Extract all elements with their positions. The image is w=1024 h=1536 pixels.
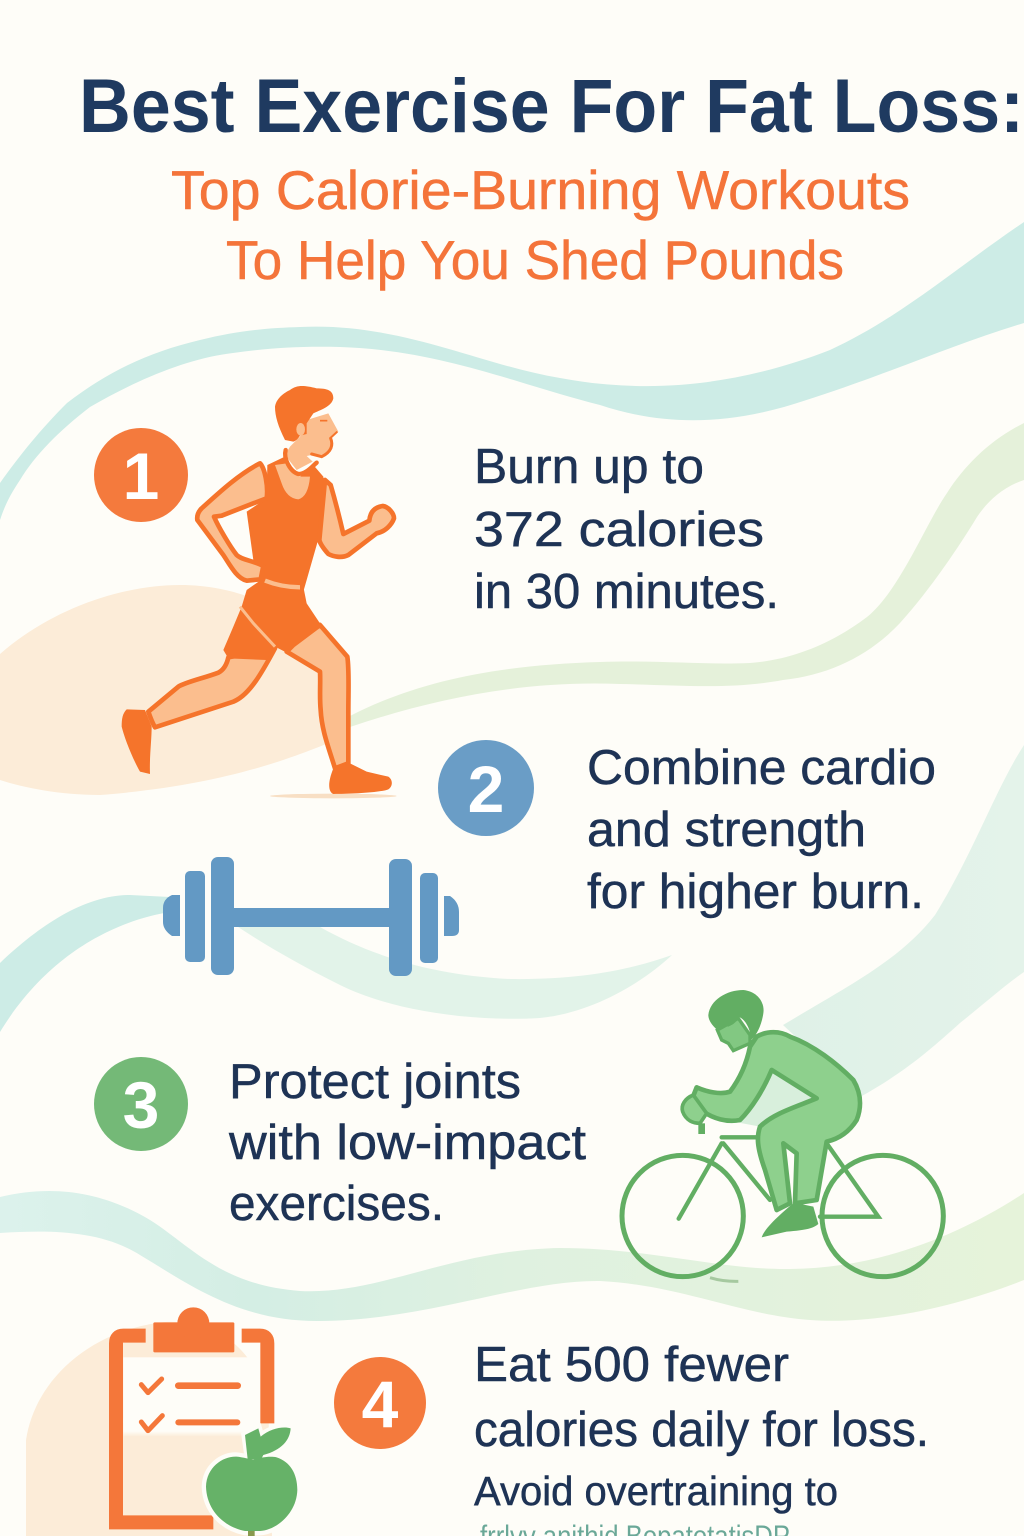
background wave: right pale band xyxy=(783,745,1024,1097)
number badge 1: 1 xyxy=(123,439,159,513)
text: cardio and strength: Combine cardio xyxy=(587,741,936,795)
subtitle xyxy=(171,159,910,291)
text: burn calories xyxy=(474,440,779,619)
text: overtraining note: Avoid overtraining to xyxy=(474,1468,838,1514)
text: low impact xyxy=(228,1055,586,1231)
background blob: peach behind clipboard xyxy=(26,1322,272,1536)
background wave: lower teal to green band xyxy=(0,1191,1024,1321)
text: burn calories: 372 calories xyxy=(474,503,764,557)
subtitle: To Help You Shed Pounds xyxy=(226,229,844,291)
icon: clipboard with apple xyxy=(116,1307,297,1536)
text: low impact: Protect joints xyxy=(229,1055,521,1109)
text: cardio and strength xyxy=(587,741,936,919)
text: cardio and strength: for higher burn. xyxy=(587,865,924,919)
icon: runner xyxy=(122,386,397,798)
text: low impact: with low-impact xyxy=(228,1116,586,1170)
text: burn calories: Burn up to xyxy=(474,440,704,494)
number badge 4: 4 xyxy=(362,1367,399,1441)
background wave: top teal band xyxy=(0,222,1024,520)
background wave: left teal band xyxy=(0,895,170,1032)
number badge 3: 3 xyxy=(123,1068,159,1142)
text: cardio and strength: and strength xyxy=(587,803,866,857)
number badge 2: 2 xyxy=(468,752,504,826)
background wave: upper green band xyxy=(350,423,1024,727)
icon: dumbbell xyxy=(163,857,459,976)
subtitle: Top Calorie-Burning Workouts xyxy=(171,159,910,221)
text: calorie deficit: calories daily for loss. xyxy=(474,1403,929,1457)
number badge 2 xyxy=(438,740,534,836)
text: burn calories: in 30 minutes. xyxy=(474,565,779,619)
background wave: pale green ribbon xyxy=(235,925,672,1019)
text: low impact: exercises. xyxy=(229,1177,444,1231)
background blob: peach behind runner xyxy=(0,585,348,795)
text: calorie deficit: Eat 500 fewer xyxy=(474,1338,789,1392)
number badge 3 xyxy=(94,1057,188,1151)
text: calorie deficit xyxy=(474,1338,929,1457)
number badge 1 xyxy=(94,428,188,522)
icon: cyclist xyxy=(622,990,943,1281)
number badge 4 xyxy=(334,1357,426,1449)
